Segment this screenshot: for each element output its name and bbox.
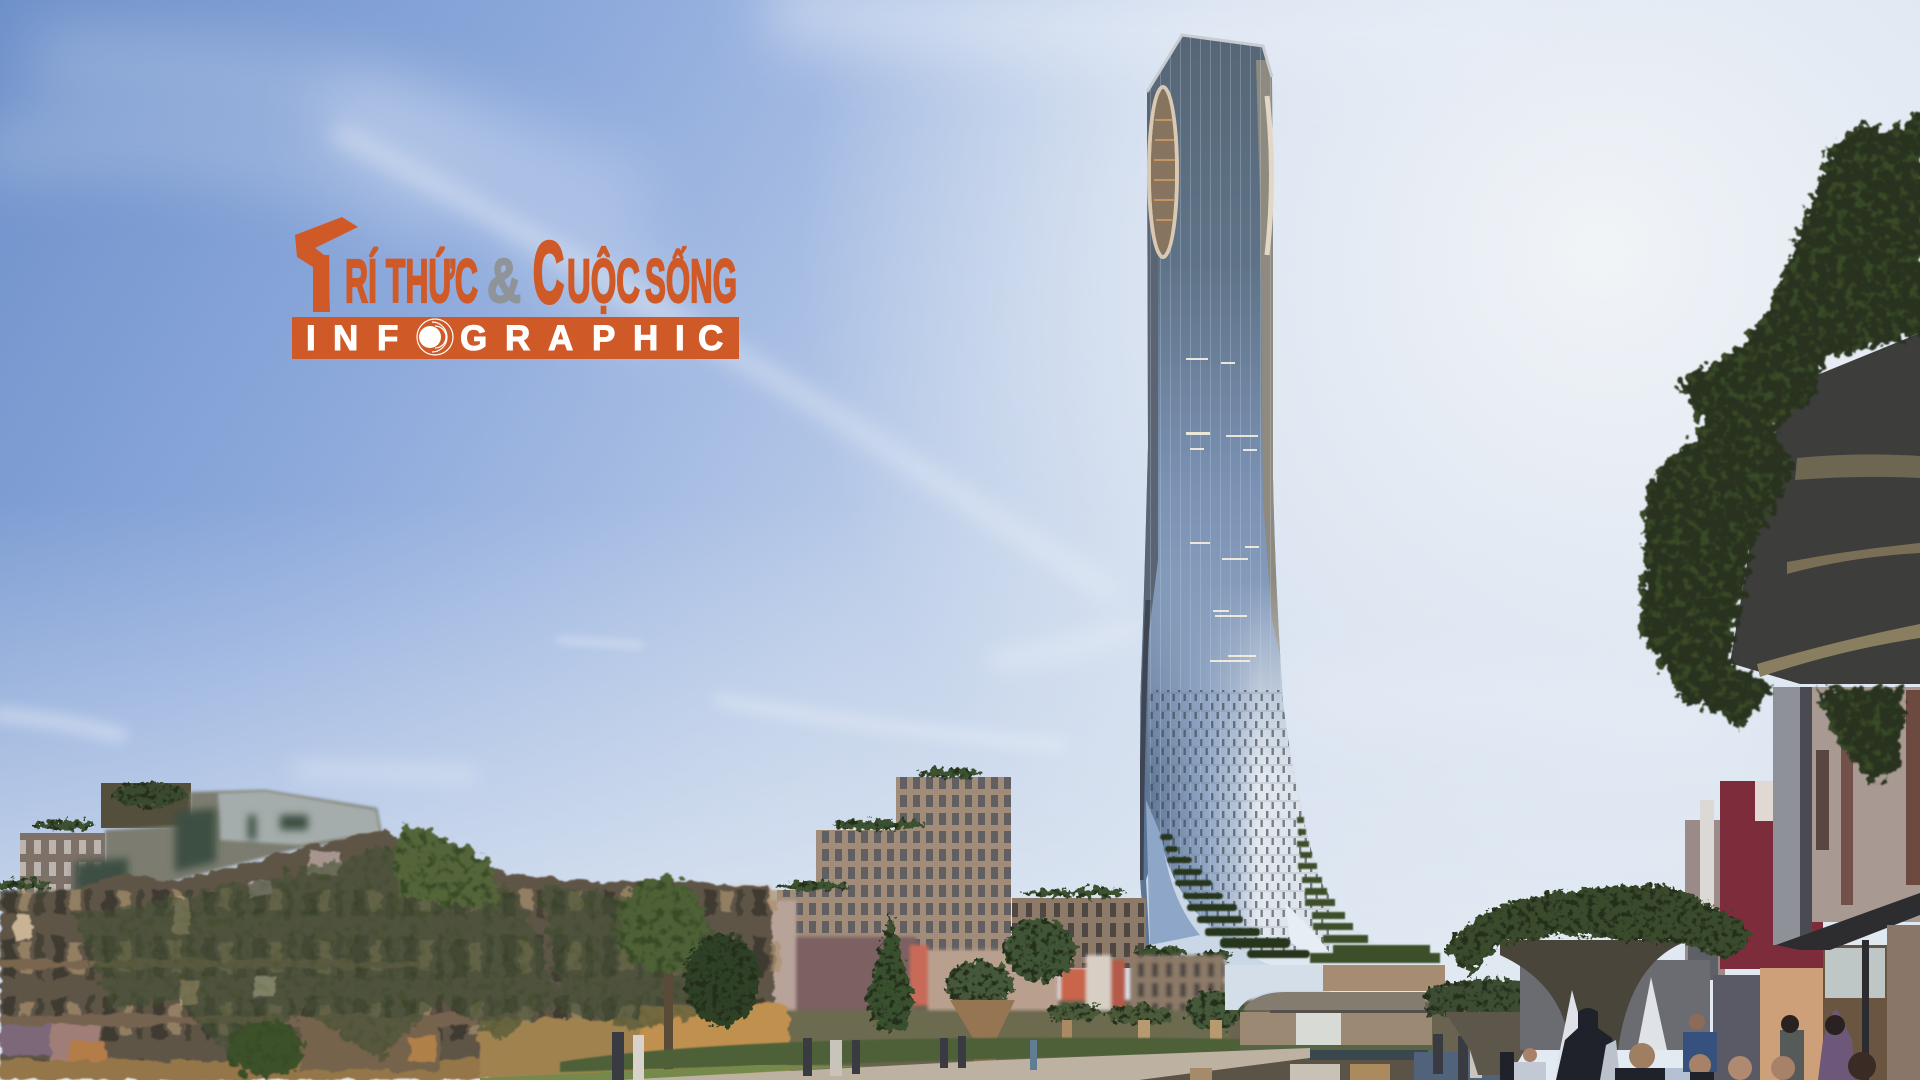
canopy (1445, 884, 1749, 975)
podium bridge (1225, 965, 1445, 1051)
grass strip (480, 1065, 870, 1080)
rooftop greenery (776, 768, 1233, 961)
logo wordmark: C (533, 225, 564, 321)
slat dark (1800, 687, 1812, 942)
side building (1685, 820, 1725, 975)
glass shard (1285, 903, 1333, 960)
red building (1720, 781, 1823, 969)
trunk arch (1500, 940, 1700, 1050)
lower bands (1240, 1012, 1432, 1050)
small pergolas (1047, 990, 1245, 1050)
far buildings (776, 768, 1233, 968)
round tree (684, 934, 760, 1026)
shop warm interior (1760, 968, 1823, 1080)
slab line (1270, 1010, 1435, 1013)
hedges (560, 1038, 1300, 1072)
glass reflection (218, 791, 380, 845)
palm tree (618, 877, 706, 1078)
grey lower side (1688, 920, 1718, 980)
tower roof edge (1147, 35, 1272, 92)
umbrella tree right (1425, 884, 1749, 1075)
brown building (1812, 687, 1920, 922)
dark reflections (75, 808, 308, 905)
lower trunk (1445, 1012, 1545, 1075)
left low buildings (0, 783, 790, 1080)
hanging foliage (1815, 685, 1905, 785)
concrete overhang (1730, 333, 1920, 684)
logo (286, 209, 739, 359)
clouds (0, 10, 1700, 775)
logo wordmark: UỘC (567, 247, 640, 315)
cafe crowd (1500, 1008, 1876, 1080)
terraces left (1160, 834, 1310, 958)
logo wordmark: & (487, 247, 521, 316)
overhang bands (1795, 454, 1920, 480)
lower gradient facade (1140, 595, 1378, 957)
white strip (1700, 800, 1714, 920)
building: low block (777, 890, 867, 960)
low colourful row (715, 887, 1500, 1080)
awning roof (1776, 893, 1920, 950)
umbrella tree trunk (950, 1000, 1015, 1066)
infographic bar: INF (306, 319, 398, 358)
foreground facade (0, 830, 790, 1080)
words: RÍ THỨC (345, 247, 478, 315)
tree canopy right (1640, 115, 1920, 785)
under arch background (1520, 960, 1710, 1050)
left edge shade (1140, 97, 1158, 898)
infographic bar: O (420, 324, 439, 351)
white podium (1225, 965, 1323, 1010)
green block foliage (112, 783, 188, 807)
brick column (1887, 925, 1920, 1080)
building: tall block (896, 777, 1011, 957)
people on promenade (612, 1032, 1482, 1080)
umbrellas (1555, 977, 1667, 1075)
roof plants edge (0, 880, 52, 890)
plaza (1414, 1052, 1500, 1080)
stone band mid (1243, 992, 1425, 1012)
perforated panel (1773, 687, 1802, 945)
left dark edge line (1141, 600, 1148, 880)
lower canopy (1425, 979, 1550, 1015)
icon: ring O (417, 319, 453, 355)
ivy mass (75, 845, 750, 1070)
stone band top (1323, 965, 1445, 991)
logo wordmark (295, 217, 736, 314)
green block (101, 783, 191, 828)
ground and water (480, 1048, 1500, 1080)
facade lines (1140, 38, 1271, 927)
lit window strips (1186, 358, 1259, 662)
back building (20, 833, 105, 898)
trees left (75, 825, 1300, 1078)
white panel (1296, 1012, 1341, 1048)
logo wordmark: SỐNG (645, 247, 737, 315)
building: mid block (816, 830, 956, 960)
letter T: T (286, 209, 356, 337)
podium swoosh (1146, 835, 1330, 1008)
palm cluster two (946, 961, 1014, 1009)
right tan side (1256, 60, 1280, 657)
tower body (1140, 36, 1378, 957)
dark platform (1310, 1050, 1428, 1060)
main foliage (1640, 115, 1920, 732)
infographic bar: GRAPHIC (460, 319, 723, 358)
red building white cap (1755, 781, 1773, 821)
right street buildings (1685, 687, 1920, 1080)
shop glass (1823, 940, 1887, 1080)
palm cluster (1004, 918, 1076, 982)
roof plants (35, 820, 95, 830)
bridge green (1240, 1045, 1440, 1051)
terraces right (1297, 817, 1440, 963)
glass box (0, 790, 382, 905)
tree crown (393, 825, 500, 905)
letter T (295, 217, 358, 312)
conifer (865, 912, 915, 1030)
tower (1130, 30, 1440, 1008)
water (1139, 1058, 1420, 1080)
tree lower (227, 1022, 303, 1078)
building: right block (1012, 898, 1146, 968)
promenade (560, 1048, 1310, 1080)
overhang corner (1767, 382, 1806, 438)
infographic bar (292, 317, 739, 359)
ring crown (1149, 87, 1272, 257)
shop front left (1713, 975, 1760, 1080)
